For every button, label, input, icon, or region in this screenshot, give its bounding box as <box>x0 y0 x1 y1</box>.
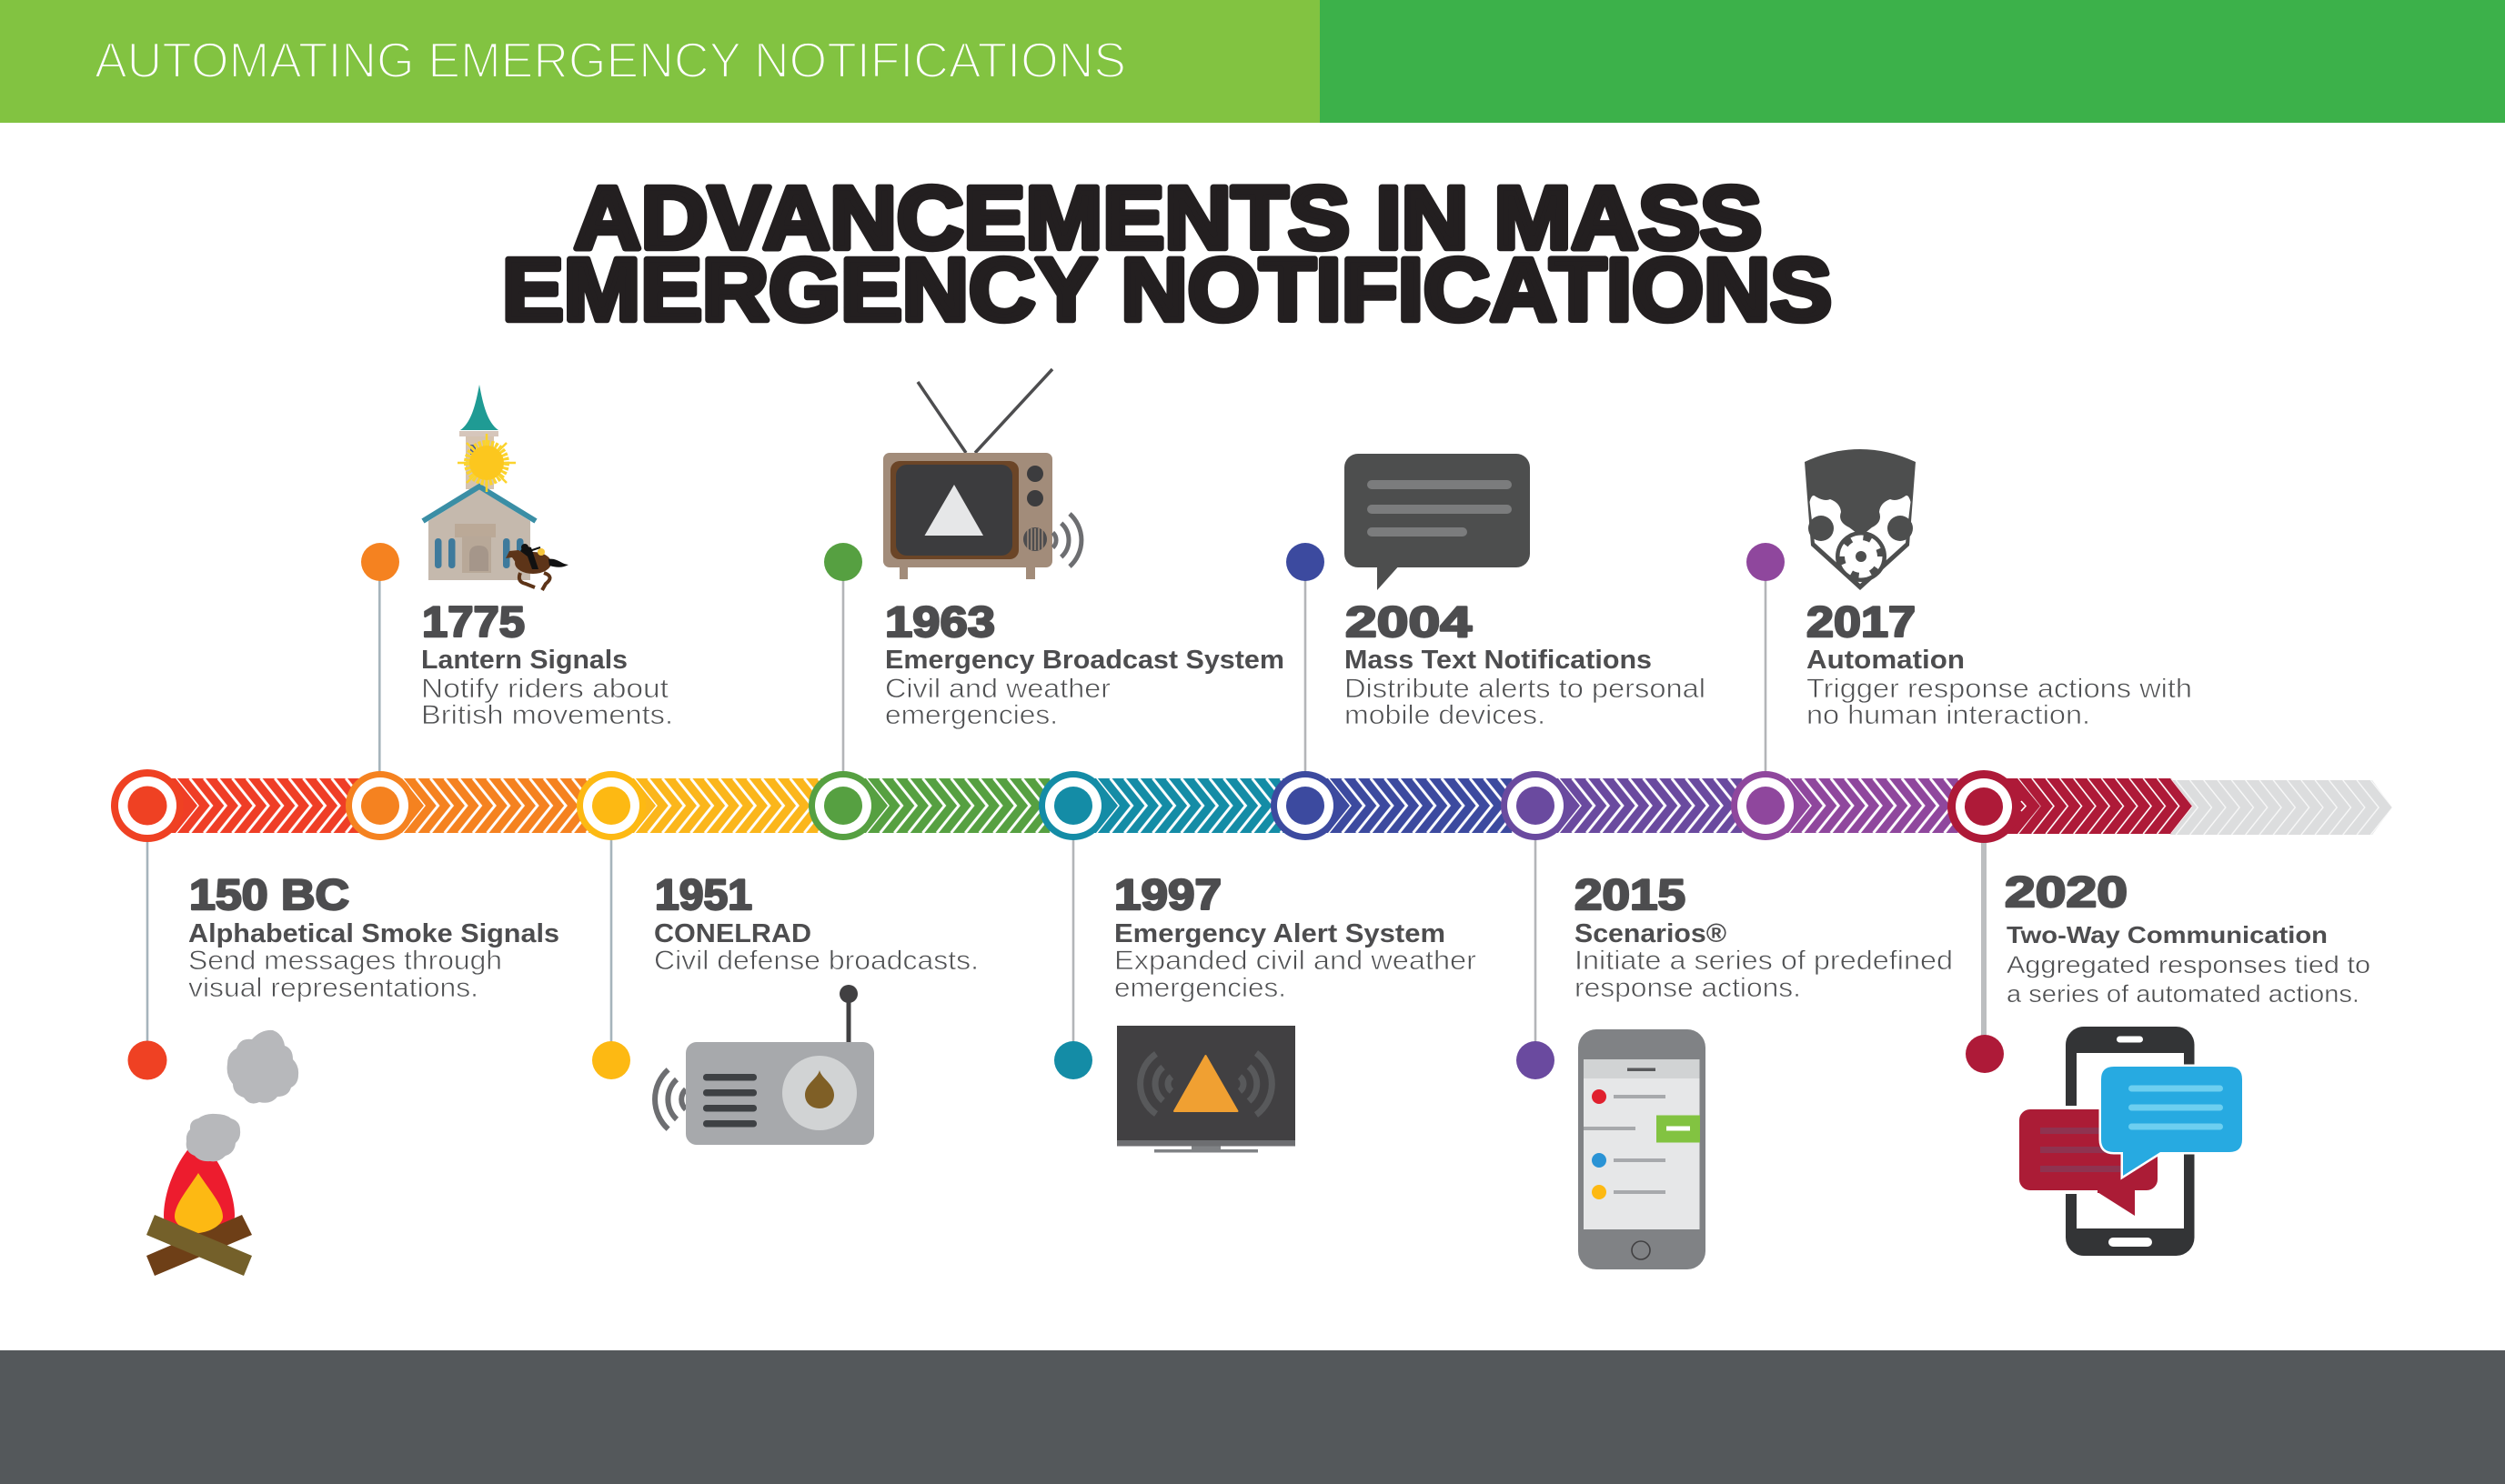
icon: vintage television <box>883 369 1081 579</box>
milestone text: 1963: Civil and weather <box>885 674 1111 704</box>
antennas <box>918 369 1052 453</box>
waves <box>1141 1053 1272 1115</box>
milestone text: 150 BC: 150 BC <box>189 871 349 919</box>
milestone text: 1775: 1775 <box>422 598 525 647</box>
stems and end dots <box>127 543 2004 1080</box>
milestone text: 150 BC: visual representations. <box>188 973 478 1003</box>
milestone text: 1775: Lantern Signals <box>421 646 628 675</box>
milestone text: 150 BC: Send messages through <box>188 946 502 976</box>
milestone text: 2015: 2015 <box>1574 871 1685 919</box>
icon: flat screen alert <box>1117 1026 1295 1153</box>
dial <box>782 1056 857 1130</box>
milestone text: 2017: Trigger response actions with <box>1806 674 2192 704</box>
milestone text: 1963: Emergency Broadcast System <box>885 646 1284 675</box>
milestone text: 2015: response actions. <box>1574 973 1801 1003</box>
speaker bars <box>703 1074 757 1128</box>
lantern light <box>458 434 516 492</box>
roof <box>423 486 536 521</box>
home button <box>1632 1241 1650 1259</box>
red bubble <box>2017 1108 2159 1216</box>
milestone text: 2015: Scenarios® <box>1574 919 1726 948</box>
tower <box>466 436 494 489</box>
radio body <box>686 1042 874 1145</box>
cabinet <box>883 453 1052 567</box>
milestone text: 2020: Two-Way Communication <box>2007 921 2328 948</box>
screen <box>1584 1059 1699 1229</box>
milestone text: 2020: Aggregated responses tied to <box>2007 951 2370 978</box>
milestone text: 2017 <box>1806 598 2192 730</box>
stand <box>1192 1146 1221 1150</box>
milestone text: 2017: no human interaction. <box>1806 700 2090 730</box>
milestone text: 1963: emergencies. <box>885 700 1058 730</box>
milestone text: 2004: mobile devices. <box>1344 700 1545 730</box>
icon: campfire with smoke signals <box>146 1030 298 1276</box>
rider on horse <box>506 544 568 590</box>
header title: AUTOMATING EMERGENCY NOTIFICATIONS <box>95 32 1126 88</box>
church body <box>428 489 530 580</box>
icon: church with lantern and rider <box>423 385 568 590</box>
milestone text: 2004: 2004 <box>1345 598 1473 647</box>
milestone text: 2004: Mass Text Notifications <box>1344 646 1652 675</box>
milestone text: 1775: Notify riders about <box>421 674 669 704</box>
list items <box>1592 1089 1606 1104</box>
spire <box>460 385 498 430</box>
icon: automation shield with gears <box>1805 449 1916 590</box>
antenna <box>846 994 851 1043</box>
speaker grille <box>1023 527 1047 551</box>
sound waves <box>1052 514 1081 567</box>
knobs <box>1027 466 1043 482</box>
milestone text: 1963 <box>885 598 1284 730</box>
milestone text: 2020: 2020 <box>2005 868 2128 917</box>
milestone text: 2004 <box>1344 598 1705 730</box>
milestone text: 2004: Distribute alerts to personal <box>1344 674 1705 704</box>
milestone text: 2020: a series of automated actions. <box>2007 980 2359 1008</box>
milestone text: 1997: Emergency Alert System <box>1114 919 1445 948</box>
screen <box>890 461 1019 559</box>
milestone text: 1997: 1997 <box>1114 871 1222 919</box>
main title: ADVANCEMENTS IN MASS <box>574 168 1762 267</box>
main title <box>502 168 1832 339</box>
flame core <box>175 1173 223 1233</box>
milestone text: 1997: emergencies. <box>1114 973 1286 1003</box>
milestone text: 2015: Initiate a series of predefined <box>1574 946 1953 976</box>
flame <box>164 1138 235 1237</box>
phone <box>2066 1027 2194 1256</box>
milestone text: 1963: 1963 <box>885 598 995 647</box>
porch and door <box>455 524 496 537</box>
milestone text: 1997: Expanded civil and weather <box>1114 946 1476 976</box>
milestone text: 1775 <box>421 598 673 730</box>
icon: speech bubble <box>1344 454 1530 590</box>
brown log <box>146 1215 252 1276</box>
milestone text: 1775: British movements. <box>421 700 673 730</box>
milestone text: 2015 <box>1574 871 1953 1003</box>
milestone text: 1951 <box>654 871 979 976</box>
lower gear <box>1836 531 1886 582</box>
icon: radio <box>655 985 874 1145</box>
legs <box>900 566 908 579</box>
header bar <box>0 0 2505 123</box>
warning triangle <box>1174 1056 1237 1111</box>
screen <box>1117 1026 1295 1146</box>
milestone text: 2017: 2017 <box>1806 598 1916 647</box>
colour segments <box>147 778 380 833</box>
blue bubble <box>2101 1067 2242 1176</box>
timeline arrow band <box>147 778 2392 835</box>
milestone text: 150 BC: Alphabetical Smoke Signals <box>188 919 559 948</box>
timeline ring markers <box>111 769 2020 843</box>
icon: smartphone scenarios <box>1578 1029 1705 1269</box>
smoke cloud upper <box>227 1030 298 1104</box>
icon: smartphone with two-way chat <box>2017 1027 2242 1256</box>
milestone text: 1951: Civil defense broadcasts. <box>654 946 979 976</box>
smoke cloud lower <box>186 1114 240 1161</box>
grey future section <box>2170 780 2392 835</box>
milestone text: 1951: 1951 <box>655 871 752 919</box>
milestone text: 2020 <box>2005 868 2370 1008</box>
milestone text: 150 BC <box>188 871 559 1003</box>
milestone text: 1951: CONELRAD <box>654 919 811 948</box>
olive log <box>146 1215 252 1276</box>
windows <box>435 538 524 568</box>
milestone text: 2017: Automation <box>1806 646 1965 675</box>
sound waves <box>655 1069 686 1129</box>
milestone text: 1997 <box>1114 871 1476 1003</box>
footer bar <box>0 1350 2505 1484</box>
main title: EMERGENCY NOTIFICATIONS <box>502 240 1832 339</box>
